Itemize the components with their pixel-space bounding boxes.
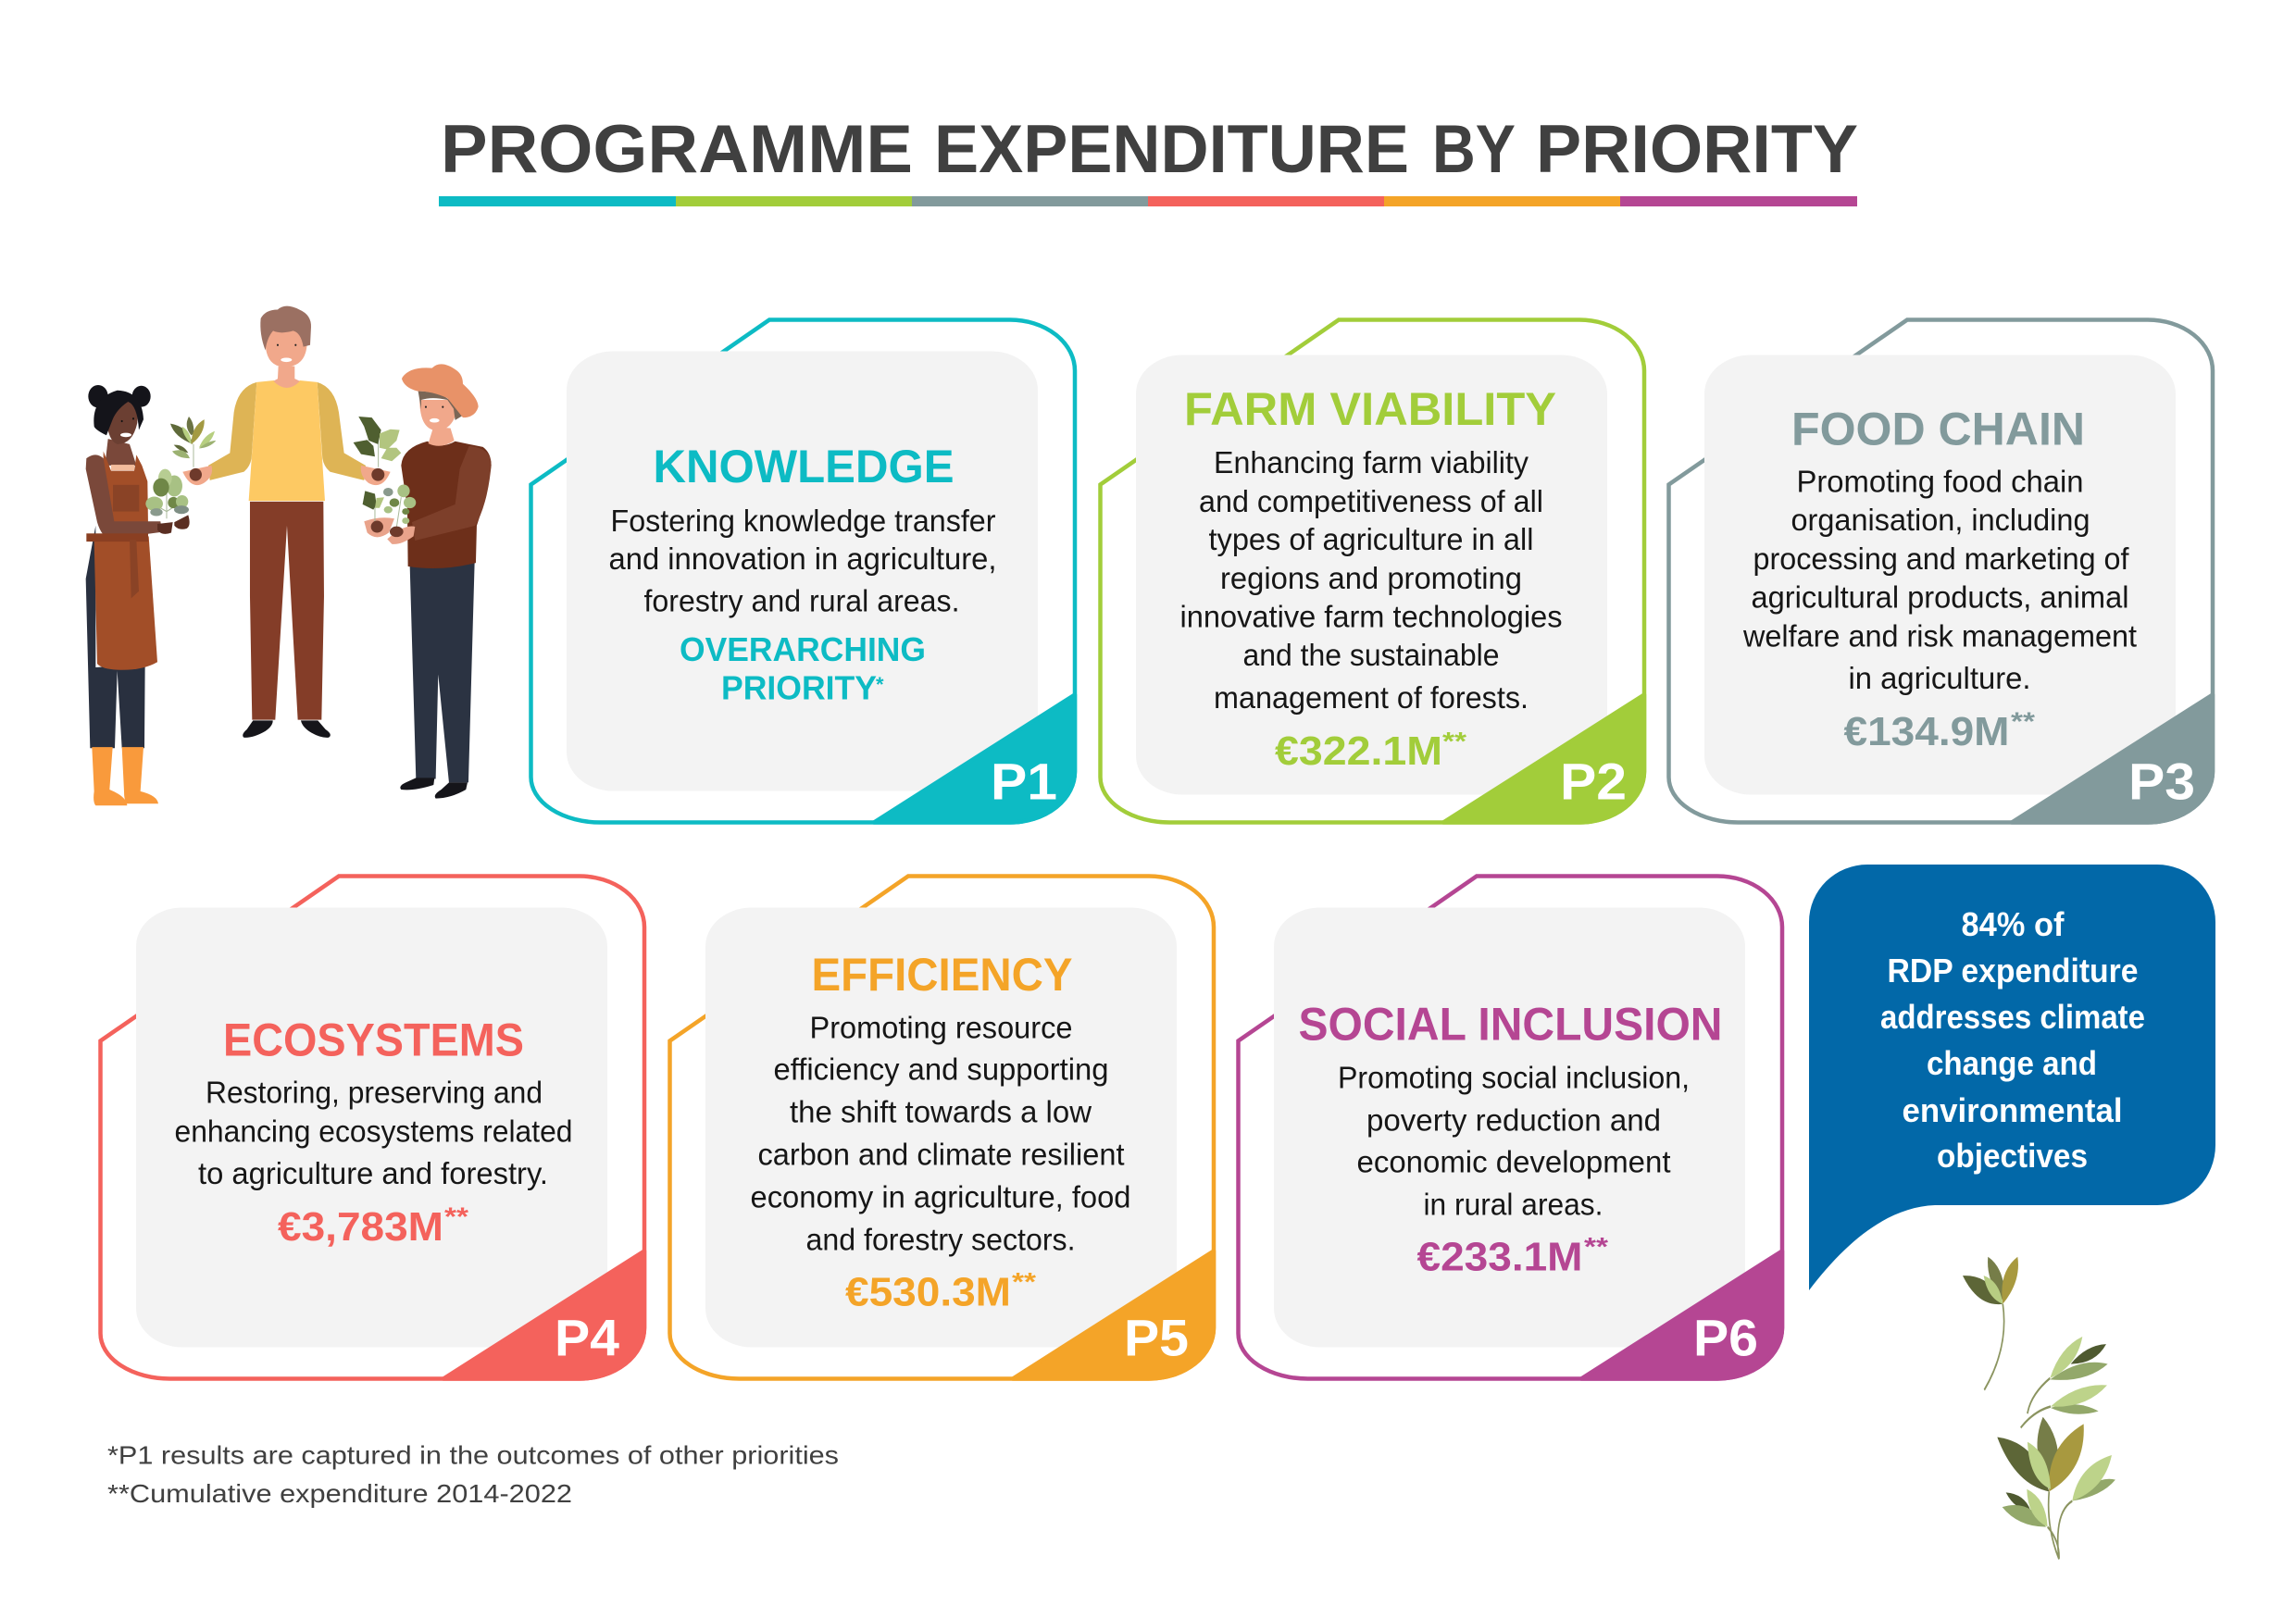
P3 description: organisation, including [1791,503,2090,537]
illustration: three farmers holding seedlings [86,306,492,805]
P6 card frame: P6 [1693,1309,1758,1366]
P2 description: regions and promoting [1220,561,1522,595]
P1 card frame [531,320,1075,822]
title: EXPENDITURE [934,112,1409,187]
P3 amount: €134.9M [1844,709,2009,754]
P2 description: management of forests. [1214,680,1529,715]
title [441,112,1858,187]
leaf sprig: middle [2021,1337,2108,1427]
P3 description [1742,465,2137,695]
footnotes [107,1440,839,1508]
title: BY [1432,112,1516,187]
seedling: left hand [170,417,216,481]
P1 heading: KNOWLEDGE [654,441,954,492]
P2 amount: €322.1M [1275,728,1442,774]
P2 card frame: P2 [1560,752,1627,811]
leaf sprig: bottom [1997,1417,2115,1559]
P1 overarching priority note: OVERARCHING [680,630,926,668]
P6 description: in rural areas. [1424,1187,1603,1222]
P4 description [174,1076,572,1190]
P5 amount: €530.3M [845,1270,1011,1314]
P5 heading: EFFICIENCY [811,949,1072,1001]
P5 description: economy in agriculture, food [750,1179,1131,1214]
icon: decorative leaves [1963,1257,2115,1559]
panel: P2 farm viability [1100,320,1644,822]
seedling [145,469,189,518]
P6 description: poverty reduction and [1366,1103,1661,1137]
P3 description: processing and marketing of [1753,541,2129,576]
P3 description: Promoting food chain [1796,465,2083,498]
title: PRIORITY [1536,112,1858,187]
farmer: man in yellow sweater [170,306,401,738]
P6 description: Promoting social inclusion, [1338,1061,1690,1094]
P2 heading: FARM VIABILITY [1184,383,1556,435]
callout text: environmental [1902,1091,2122,1129]
P2 amount: ** [1442,727,1466,755]
P1 description [609,504,996,618]
P4 description: Restoring, preserving and [206,1076,543,1109]
P5 description: carbon and climate resilient [757,1137,1124,1172]
P4 description: enhancing ecosystems related [174,1114,572,1148]
title: PROGRAMME [441,112,913,187]
callout: climate share speech bubble [1809,865,2215,1290]
callout text: change and [1927,1044,2097,1082]
seedlings in hands [363,484,416,537]
seedling: right hand [354,417,401,481]
P5 card frame: P5 [1124,1309,1189,1366]
P1 overarching priority note: * [876,673,884,696]
P5 amount: ** [1012,1267,1036,1296]
panel: P6 social inclusion [1239,876,1782,1379]
P6 description: economic development [1357,1144,1670,1179]
P5 description: efficiency and supporting [774,1052,1109,1087]
P6 description [1338,1061,1690,1222]
P1 overarching priority note [680,630,926,707]
P3 card frame [1668,320,2213,822]
panel: P4 ecosystems [100,876,644,1379]
P2 description: and competitiveness of all [1199,484,1543,518]
P3 card frame: P3 [2128,752,2195,811]
P5 description [750,1011,1131,1257]
P5 description: Promoting resource [809,1011,1072,1044]
P6 heading: SOCIAL INCLUSION [1298,998,1722,1050]
title colour bar [439,196,1857,206]
panel: P3 food chain [1668,320,2213,822]
P6 amount: €233.1M [1416,1235,1583,1279]
P3 description: in agriculture. [1848,661,2031,695]
callout text [1880,905,2145,1175]
P4 amount: ** [444,1201,468,1231]
panel: P5 efficiency [670,876,1214,1379]
P3 heading: FOOD CHAIN [1791,404,2085,455]
P2 description [1179,445,1563,715]
callout text: 84% of [1961,905,2065,943]
P2 description: and the sustainable [1242,638,1500,672]
P3 description: welfare and risk management [1742,618,2137,653]
callout text: objectives [1937,1137,2088,1175]
footnotes: **Cumulative expenditure 2014-2022 [107,1479,572,1508]
leaf sprig: top [1963,1257,2018,1390]
P1 card frame: P1 [991,752,1057,811]
P4 card frame [100,876,644,1379]
P1 description: forestry and rural areas. [644,583,959,618]
P1 description: and innovation in agriculture, [609,541,996,576]
P1 description: Fostering knowledge transfer [611,504,996,538]
P2 description: Enhancing farm viability [1214,445,1529,479]
P3 amount: ** [2011,707,2035,735]
farmer: man with straw hat [363,364,492,799]
P5 description: and forestry sectors. [805,1222,1076,1257]
P4 heading: ECOSYSTEMS [223,1014,524,1066]
P5 card frame [670,876,1214,1379]
P4 amount: €3,783M [278,1204,443,1250]
P6 amount: ** [1584,1232,1608,1261]
P2 description: types of agriculture in all [1209,522,1533,556]
P6 card frame [1239,876,1782,1379]
callout text: addresses climate [1880,998,2145,1036]
P2 card frame [1100,320,1644,822]
P4 description: to agriculture and forestry. [198,1156,548,1190]
P2 description: innovative farm technologies [1179,600,1563,633]
footnotes: *P1 results are captured in the outcomes of other priorities [107,1440,839,1470]
P1 overarching priority note: PRIORITY [721,668,877,707]
P4 card frame: P4 [555,1309,619,1366]
P5 description: the shift towards a low [790,1094,1092,1129]
panel: P1 knowledge [531,320,1075,822]
P3 description: agricultural products, animal [1752,579,2129,615]
callout text: RDP expenditure [1887,952,2139,989]
farmer: woman with apron [86,385,190,805]
